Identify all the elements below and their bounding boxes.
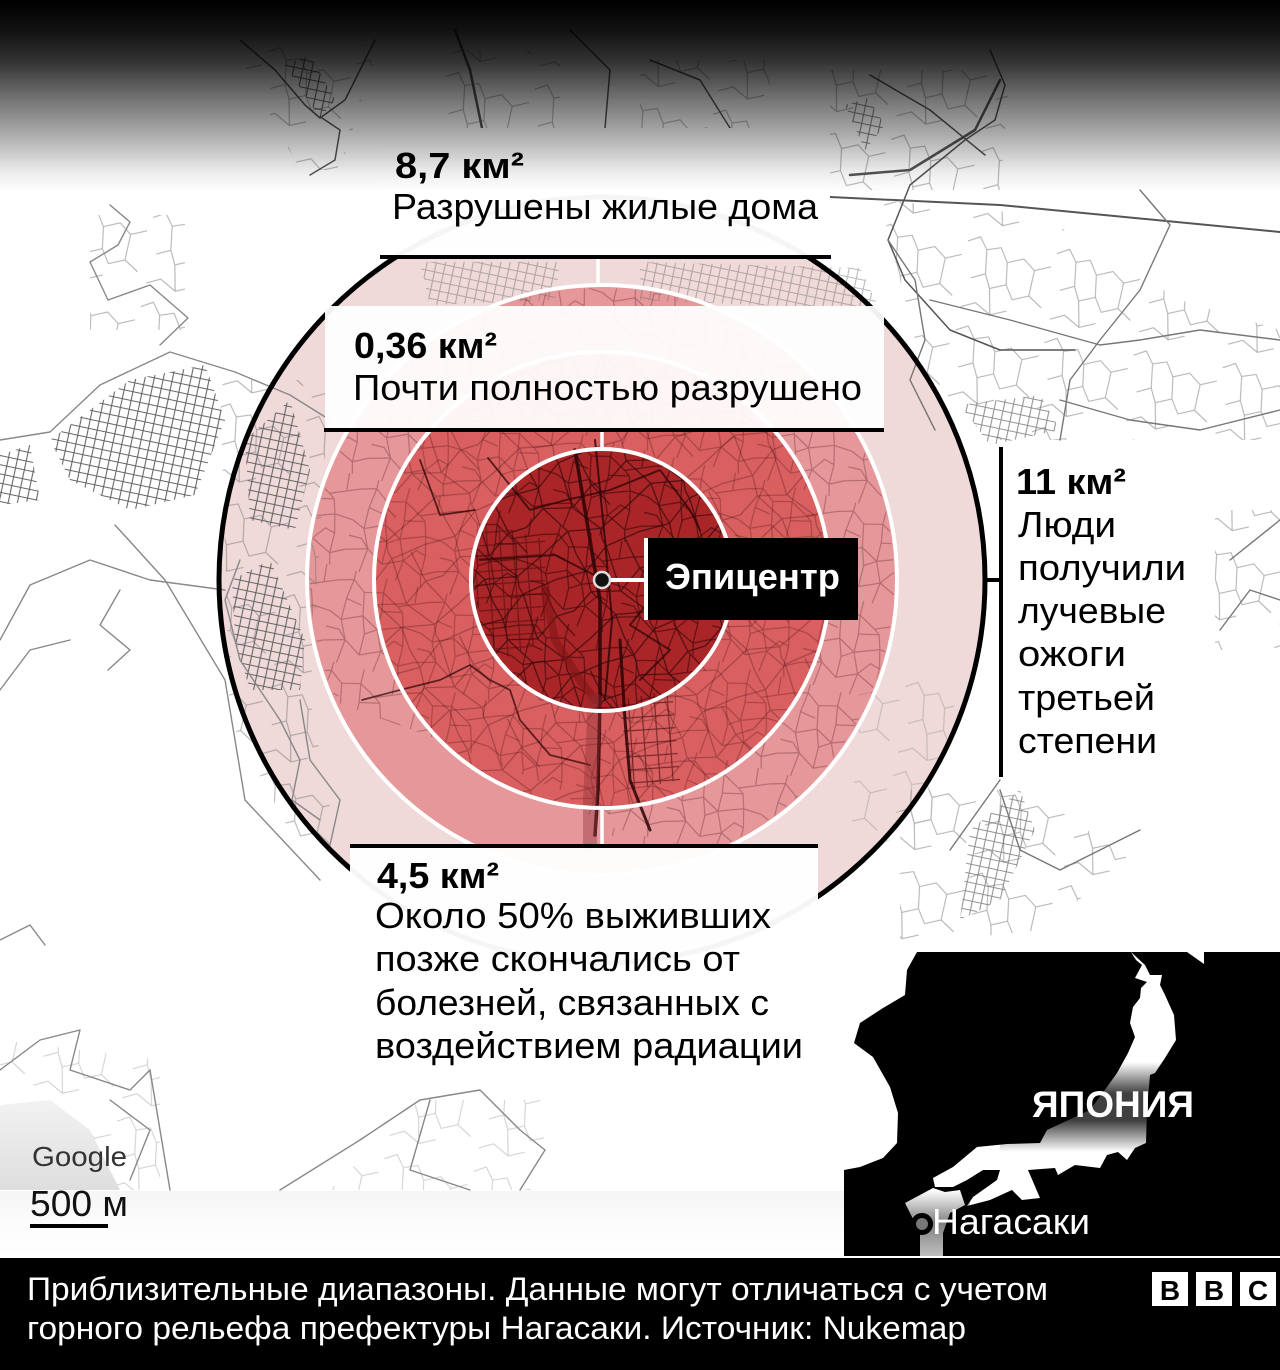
map credit and scale: Google	[32, 1141, 127, 1172]
outer roads right	[830, 190, 1280, 870]
map credit and scale	[30, 1141, 128, 1228]
footer: Приблизительные диапазоны. Данные могут отличаться с учетом	[27, 1271, 1048, 1307]
Japan main islands	[933, 952, 1176, 1206]
label: 11 km2: степени	[1018, 720, 1157, 761]
label backgrounds	[325, 128, 1190, 1076]
footer: горного рельефа префектуры Нагасаки. Источник: Nukemap	[27, 1310, 966, 1346]
BBC logo: C	[1248, 1275, 1268, 1306]
top right land	[1187, 952, 1204, 964]
epicentre marker: Эпицентр	[665, 556, 840, 597]
footer	[0, 1258, 1280, 1370]
label: 0.36 km2	[324, 325, 884, 432]
inset map: Japan: ЯПОНИЯ	[1032, 1084, 1194, 1125]
outer roads top	[240, 30, 1075, 350]
leader ticks	[598, 258, 602, 846]
label: 11 km2: Люди	[1018, 504, 1116, 545]
label: 0.36 km2: Почти полностью разрушено	[353, 367, 862, 408]
label: 11 km2: 11 км²	[1016, 461, 1126, 502]
label: 11 km2: третьей	[1018, 677, 1155, 718]
label: 4.5 km2: 4,5 км²	[377, 855, 499, 896]
BBC logo	[1152, 1272, 1276, 1306]
label: 8.7 km2	[380, 145, 831, 259]
main roads and river	[362, 440, 700, 845]
epicentre marker	[594, 538, 858, 620]
BBC logo: B	[1160, 1275, 1180, 1306]
inset map: Japan	[844, 952, 1280, 1256]
label: 8.7 km2: 8,7 км²	[395, 145, 524, 186]
water patch	[0, 1100, 120, 1190]
label: 4.5 km2: воздействием радиации	[375, 1025, 803, 1066]
BBC logo: B	[1204, 1275, 1224, 1306]
label: 4.5 km2: болезней, связанных с	[375, 982, 769, 1023]
map credit and scale: 500 м	[30, 1183, 128, 1224]
label: 11 km2: лучевые	[1018, 590, 1166, 631]
label: 11 km2	[985, 447, 1186, 777]
Kyushu	[905, 1188, 965, 1256]
label: 0.36 km2: 0,36 км²	[354, 325, 497, 366]
street grids	[0, 55, 1060, 920]
label: 4.5 km2	[350, 844, 818, 1066]
top gradient	[0, 0, 1280, 192]
Nagasaki marker	[914, 1216, 930, 1232]
label: 11 km2: получили	[1018, 547, 1186, 588]
label: 8.7 km2: Разрушены жилые дома	[392, 186, 819, 227]
outer roads left	[0, 205, 545, 1190]
circle outlines	[219, 197, 985, 963]
land shading	[1000, 1062, 1170, 1152]
label: 11 km2: ожоги	[1018, 633, 1126, 674]
label: 4.5 km2: позже скончались от	[375, 938, 740, 979]
white bottom strip	[0, 1191, 844, 1256]
mainland Asia	[844, 952, 917, 1170]
label: 4.5 km2: Около 50% выживших	[375, 895, 771, 936]
inset map: Japan: Нагасаки	[932, 1201, 1090, 1242]
panel: blast radius circles	[219, 197, 985, 963]
street mesh in the rings	[300, 280, 900, 860]
